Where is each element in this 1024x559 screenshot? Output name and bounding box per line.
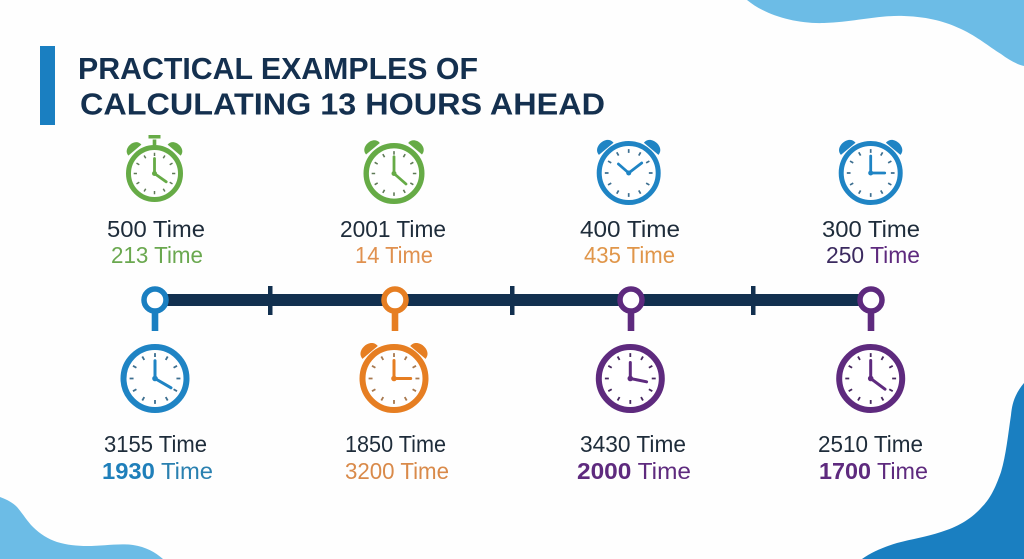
example 2 (top): [340, 137, 446, 268]
label: 3430 Time / 2000 Time: 3430 Time: [580, 431, 686, 457]
label: 500 Time / 213 Time: [107, 216, 205, 268]
example 4 (top): [822, 137, 920, 268]
label: 3155 Time / 1930 Time: 1930 Time: [102, 458, 213, 484]
icon: blue clock: [124, 347, 186, 410]
background blob: bottom left: [0, 497, 163, 559]
label: 1850 Time / 3200 Time: 3200 Time: [345, 458, 449, 484]
icon: green alarm clock: [361, 137, 427, 201]
label: 300 Time / 250 Time: 250 Time: [826, 242, 920, 268]
icon: blue alarm clock: [836, 137, 906, 202]
timeline: [144, 286, 882, 331]
label: 2510 Time / 1700 Time: [818, 431, 928, 484]
example 8 (bottom): [818, 347, 928, 484]
example 6 (bottom): [345, 339, 449, 484]
label: 1850 Time / 3200 Time: [345, 431, 449, 484]
icon: purple clock: [839, 347, 902, 410]
example 5 (bottom): [102, 347, 213, 484]
label: 1850 Time / 3200 Time: 1850 Time: [345, 431, 446, 457]
title: PRACTICAL EXAMPLES OF: [78, 51, 478, 86]
label: 2510 Time / 1700 Time: 1700 Time: [819, 458, 928, 484]
label: 2001 Time / 14 Time: [340, 216, 446, 268]
timeline marker: purple end: [860, 289, 882, 331]
title accent bar: [40, 46, 55, 125]
label: 3155 Time / 1930 Time: 3155 Time: [104, 431, 207, 457]
label: 500 Time / 213 Time: 213 Time: [111, 242, 203, 268]
title: CALCULATING 13 HOURS AHEAD: [80, 86, 605, 122]
title: [78, 51, 605, 122]
label: 2001 Time / 14 Time: 14 Time: [355, 242, 433, 268]
icon: purple clock: [599, 347, 662, 410]
label: 2001 Time / 14 Time: 2001 Time: [340, 216, 446, 242]
label: 2510 Time / 1700 Time: 2510 Time: [818, 431, 923, 457]
icon: blue alarm clock: [594, 137, 664, 202]
label: 3430 Time / 2000 Time: 2000 Time: [577, 458, 691, 484]
background blob: top right: [747, 0, 1024, 66]
label: 400 Time / 435 Time: 435 Time: [584, 242, 675, 268]
example 7 (bottom): [577, 347, 691, 484]
background blob: bottom right: [862, 383, 1024, 559]
timeline marker: orange: [384, 289, 406, 331]
example 1 (top): [107, 135, 205, 268]
icon: orange alarm clock: [357, 339, 431, 410]
timeline marker: purple: [620, 289, 642, 331]
label: 400 Time / 435 Time: 400 Time: [580, 216, 680, 242]
label: 300 Time / 250 Time: [822, 216, 920, 268]
label: 400 Time / 435 Time: [580, 216, 680, 268]
timeline marker: blue: [144, 289, 166, 331]
icon: green stopwatch: [124, 135, 185, 200]
example 3 (top): [580, 137, 680, 268]
label: 3430 Time / 2000 Time: [577, 431, 691, 484]
label: 500 Time / 213 Time: 500 Time: [107, 216, 205, 242]
label: 3155 Time / 1930 Time: [102, 431, 213, 484]
label: 300 Time / 250 Time: 300 Time: [822, 216, 920, 242]
